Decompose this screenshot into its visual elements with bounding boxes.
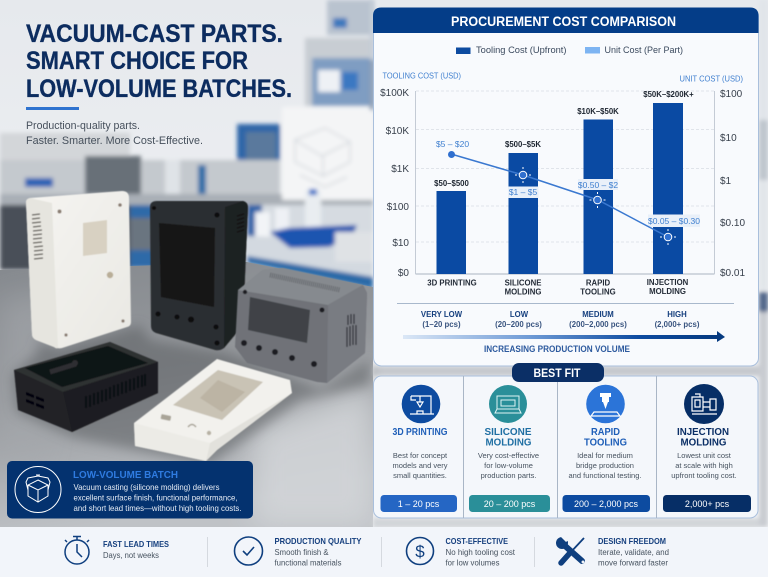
column: rapid tooling: bridge production [576,461,634,470]
callout: low-volume batch: and short lead times—without high tooling costs. [74,503,242,513]
production volume labels: MEDIUM [582,310,614,319]
benefit: design freedom: DESIGN FREEDOM [598,536,666,546]
legend: Tooling Cost (Upfront) [476,45,566,56]
product: grey enclosure [235,268,367,383]
column: rapid tooling: and functional testing. [569,471,641,480]
left axis labels: $10 [392,238,409,249]
benefit: production quality: Smooth finish & [274,548,329,557]
title [26,20,292,103]
benefit: fast lead times: FAST LEAD TIMES [103,539,169,549]
panel header [373,8,758,33]
column: injection molding: Lowest unit cost [677,451,732,460]
right axis labels: $0.01 [720,268,745,279]
icon: stopwatch [65,536,89,564]
column: injection molding: INJECTION [677,426,729,438]
icon: 3D printer [402,385,440,423]
product: white sloped enclosure [134,359,292,461]
benefit: production quality: PRODUCTION QUALITY [274,536,362,546]
unit cost label backgrounds [508,179,700,227]
bar chart: tooling and unit cost [380,88,745,296]
unit cost labels: $0.50 – $2 [578,180,618,190]
right axis labels: $0.10 [720,218,745,229]
axis titles: UNIT COST (USD) [680,74,743,84]
left axis labels: $100K [380,88,409,99]
production volume labels: HIGH [667,310,687,319]
benefit: design freedom [556,534,669,568]
column: 3D printing: 1 – 20 pcs [398,499,440,509]
panel header: PROCUREMENT COST COMPARISON [451,14,676,29]
column: rapid tooling [562,385,650,512]
column: injection molding: 2,000+ pcs [685,499,730,509]
column: silicone molding: Very cost-effective [478,451,539,460]
column: silicone molding: SILICONE [484,426,532,438]
right axis labels: $100 [720,89,743,100]
legend [456,45,683,56]
benefit: fast lead times [65,536,169,564]
right axis labels: $10 [720,133,737,144]
column: rapid tooling: TOOLING [584,436,627,448]
bar value labels [434,90,694,188]
icon: injection machine [684,384,724,424]
title: VACUUM-CAST PARTS. [26,20,283,48]
right axis labels [720,89,745,279]
category labels: MOLDING [505,288,541,296]
axis titles [382,72,743,84]
production volume labels: VERY LOW [421,310,463,319]
left axis labels [380,88,409,279]
left axis labels: $1K [391,164,409,175]
benefit: cost-effective: COST-EFFECTIVE [446,536,508,546]
column: injection molding: upfront tooling cost. [671,471,737,480]
arrow: increasing production volume: INCREASING PRODUCTION VOLUME [484,344,630,354]
column: silicone molding [469,385,550,512]
left axis labels: $10K [386,126,409,137]
icon: check circle [234,537,262,565]
left axis labels: $100 [387,202,409,213]
unit cost line [448,151,676,245]
subtitle [26,120,203,147]
subtitle: Production-quality parts. [26,120,140,132]
benefit: fast lead times: Days, not weeks [103,551,159,560]
benefit: design freedom: Iterate, validate, and [598,548,669,557]
column: silicone molding: production parts. [481,471,536,480]
column: 3D printing: small quantities. [393,471,447,480]
callout: low-volume batch [7,461,253,518]
bar value labels: $50K–$200K+ [643,90,694,99]
bars [436,103,683,274]
unit cost labels: $1 – $5 [509,187,537,197]
category labels: SILICONE [505,278,541,288]
right axis labels: $1 [720,176,732,187]
benefit: production quality [234,536,362,568]
title: SMART CHOICE FOR [26,47,248,75]
column: 3D printing: Best for concept [393,451,448,460]
best fit badge: BEST FIT [534,368,580,380]
category labels [427,278,689,296]
column: rapid tooling: RAPID [591,426,620,438]
bar value labels: $10K–$50K [577,107,619,116]
column: 3D printing: 3D PRINTING [392,427,448,438]
subtitle: Faster. Smarter. More Cost-Effective. [26,135,203,147]
benefit: design freedom: move forward faster [598,558,668,568]
icon: dollar circle: $ [415,542,425,561]
column: rapid tooling: Ideal for medium [577,451,633,460]
category labels: MOLDING [649,287,686,296]
unit cost labels: $0.05 – $0.30 [648,216,700,226]
legend: Unit Cost (Per Part) [604,45,683,56]
icon: silicone mold [489,385,527,423]
callout: low-volume batch: Vacuum casting (silicone molding) delivers [74,482,220,492]
best fit badge [512,363,604,382]
column: injection molding: MOLDING [680,436,726,448]
production volume labels: (1–20 pcs) [422,320,461,329]
category labels: 3D PRINTING [427,278,477,288]
icon: CNC tooling [586,385,625,423]
bar value labels: $50–$500 [434,179,470,188]
category labels: TOOLING [580,288,616,296]
panel: best fit [374,363,758,518]
footer strip [0,527,768,577]
column: injection molding [663,384,751,512]
column: 3D printing: models and very [392,461,448,470]
production volume labels: LOW [510,310,529,319]
benefit: cost-effective: No high tooling cost [446,548,516,557]
column: silicone molding: for low-volume [484,461,533,470]
product: white enclosure [26,191,131,348]
product shadows [12,325,370,465]
production volume labels [421,310,700,329]
column: silicone molding: MOLDING [486,436,532,448]
unit cost labels: $5 – $20 [436,139,469,149]
column: injection molding: at scale with high [675,461,733,470]
column: 3D printing [380,385,457,512]
production volume labels: (2,000+ pcs) [655,320,700,329]
production volume labels: (200–2,000 pcs) [569,320,627,329]
axis titles: TOOLING COST (USD) [382,72,461,80]
product: tall black enclosure [150,201,248,350]
unit cost labels [436,139,700,226]
icon: wrench and screwdriver [556,534,584,564]
left axis labels: $0 [398,268,409,279]
category labels: RAPID [586,278,610,288]
benefit: cost-effective: for low volumes [446,558,500,568]
callout: low-volume batch: excellent surface finish, functional performance, [74,492,238,502]
panel: procurement cost comparison [373,8,758,366]
arrow: increasing production volume [403,331,725,354]
title accent rule [26,107,79,110]
column: rapid tooling: 200 – 2,000 pcs [574,499,639,509]
production volume labels: (20–200 pcs) [495,320,542,329]
callout: low-volume batch: LOW-VOLUME BATCH [73,469,178,481]
benefit: production quality: functional materials [274,558,342,568]
bar value labels: $500–$5K [505,140,541,149]
benefit: cost-effective [406,536,516,568]
icon: box in circle [15,466,61,512]
category labels: INJECTION [647,278,689,287]
title: LOW-VOLUME BATCHES. [26,75,292,103]
column: silicone molding: 20 – 200 pcs [484,499,536,509]
product: black tray [14,342,158,432]
